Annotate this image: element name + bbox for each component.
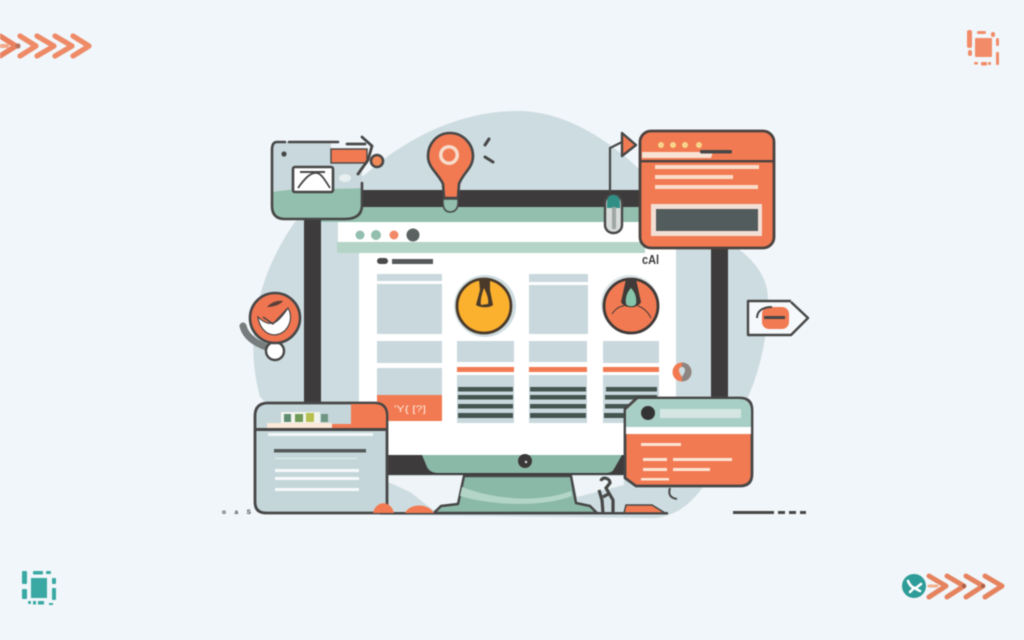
image icon xyxy=(293,167,333,192)
icon: magnifier badge xyxy=(243,293,300,360)
panel: bottom left card xyxy=(255,403,387,513)
icon: top right orange frame xyxy=(967,30,999,66)
screen content area xyxy=(359,242,676,456)
pale floor areas beside the stand xyxy=(388,476,624,510)
small caption marks: o a S xyxy=(222,509,252,516)
card text lines xyxy=(268,433,373,491)
dash line xyxy=(733,511,806,514)
panel: top right orange window xyxy=(610,131,774,248)
icon: bottom left teal frame xyxy=(22,571,56,605)
card text lines xyxy=(641,443,732,480)
background blob xyxy=(253,111,768,518)
panel: bottom right card xyxy=(625,398,752,499)
monitor frame xyxy=(304,190,728,402)
card header xyxy=(255,404,387,431)
card header xyxy=(626,399,751,434)
chevron tip shadows xyxy=(962,584,985,588)
base line xyxy=(380,512,668,514)
column 3 xyxy=(529,274,588,423)
column 1: 'Y{ [?] xyxy=(394,404,426,414)
arrows: bottom right chevrons with badge xyxy=(902,574,1002,598)
dark banner xyxy=(651,204,762,236)
browser toolbar xyxy=(337,222,645,253)
screen top green band xyxy=(321,207,641,222)
icon: teal badge xyxy=(902,574,926,598)
text lines xyxy=(655,165,759,189)
orange gauge xyxy=(604,279,658,333)
small figure and plinth xyxy=(599,478,665,513)
flag tab with hook xyxy=(331,137,383,174)
arrows: top left chevrons xyxy=(0,36,89,56)
column 1 xyxy=(377,274,442,421)
column 2 xyxy=(454,275,516,423)
orange mounds at base xyxy=(373,503,434,513)
sparks xyxy=(485,139,493,162)
monitor stand xyxy=(434,476,597,513)
icon: mouse xyxy=(605,195,622,233)
monitor chin xyxy=(388,454,638,475)
small orange pin dot xyxy=(672,362,692,382)
monitor xyxy=(304,190,728,514)
panel: top left image card xyxy=(272,137,383,219)
icon: tag label xyxy=(748,301,808,335)
header text marks: cAl xyxy=(642,252,659,267)
column 4 xyxy=(601,275,659,423)
yellow gauge xyxy=(457,279,511,333)
window header xyxy=(641,142,773,162)
cursor arrow and stem xyxy=(610,133,636,192)
icon: location bulb xyxy=(428,133,493,212)
speech tail xyxy=(669,488,677,499)
header text marks xyxy=(377,252,659,267)
